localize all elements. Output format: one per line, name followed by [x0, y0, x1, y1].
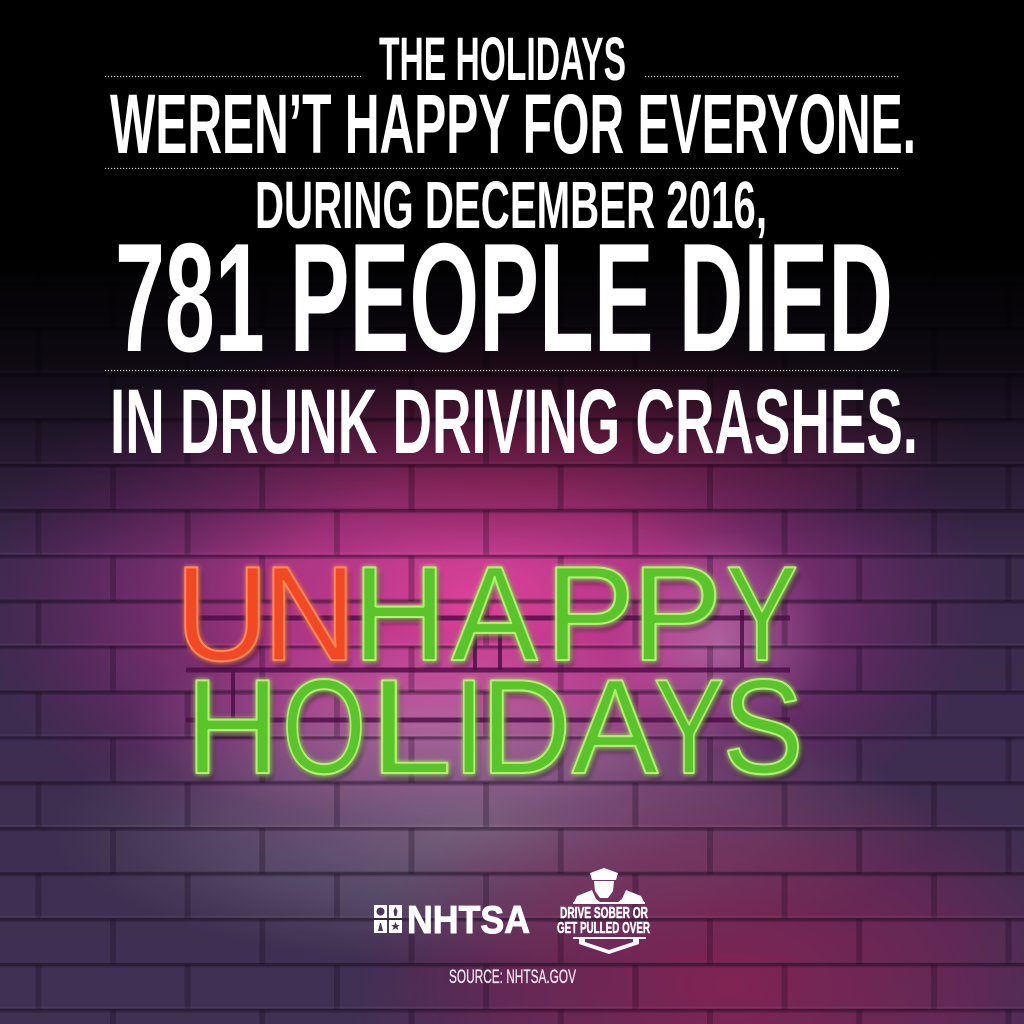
neon word: unhappy: H [353, 538, 446, 689]
icon: nhtsa four-square mark [374, 905, 402, 933]
logo: nhtsa [374, 899, 530, 942]
neon word: holidays [186, 651, 804, 802]
badge text line two: GET PULLED OVER [557, 920, 650, 937]
headline block [105, 25, 918, 473]
neon word: holidays: A [572, 651, 658, 802]
neon word: holidays: S [722, 652, 804, 802]
neon word: unhappy: P [632, 539, 722, 689]
neon word: unhappy: A [451, 538, 538, 689]
badge text line one: DRIVE SOBER OR [560, 905, 648, 922]
dotted rule [105, 370, 900, 372]
neon word: holidays: I [453, 652, 485, 802]
logo: drive sober or get pulled over [557, 868, 650, 954]
neon word: holidays: O [282, 651, 366, 802]
wordmark: nhtsa: NHTSA [407, 899, 530, 942]
dotted rule [105, 168, 900, 170]
neon word: unhappy: U [175, 538, 269, 689]
dotted rule right [645, 76, 900, 78]
neon word: unhappy: P [545, 538, 635, 689]
heading: the holidays: THE HOLIDAYS [379, 25, 626, 93]
neon word: unhappy: Y [726, 538, 798, 689]
neon word: holidays: L [370, 651, 452, 802]
neon sign: unhappy holidays [175, 538, 804, 802]
dotted rule left [105, 76, 361, 78]
source credit: SOURCE: NHTSA.GOV [449, 967, 576, 988]
neon word: holidays: Y [654, 651, 724, 802]
neon word: unhappy [175, 538, 798, 689]
icon: officer badge shield [573, 868, 646, 954]
neon word: holidays: D [481, 651, 571, 802]
neon word: unhappy: N [263, 538, 356, 689]
neon sign mounting bars [186, 610, 790, 722]
neon word: holidays: H [186, 651, 279, 802]
